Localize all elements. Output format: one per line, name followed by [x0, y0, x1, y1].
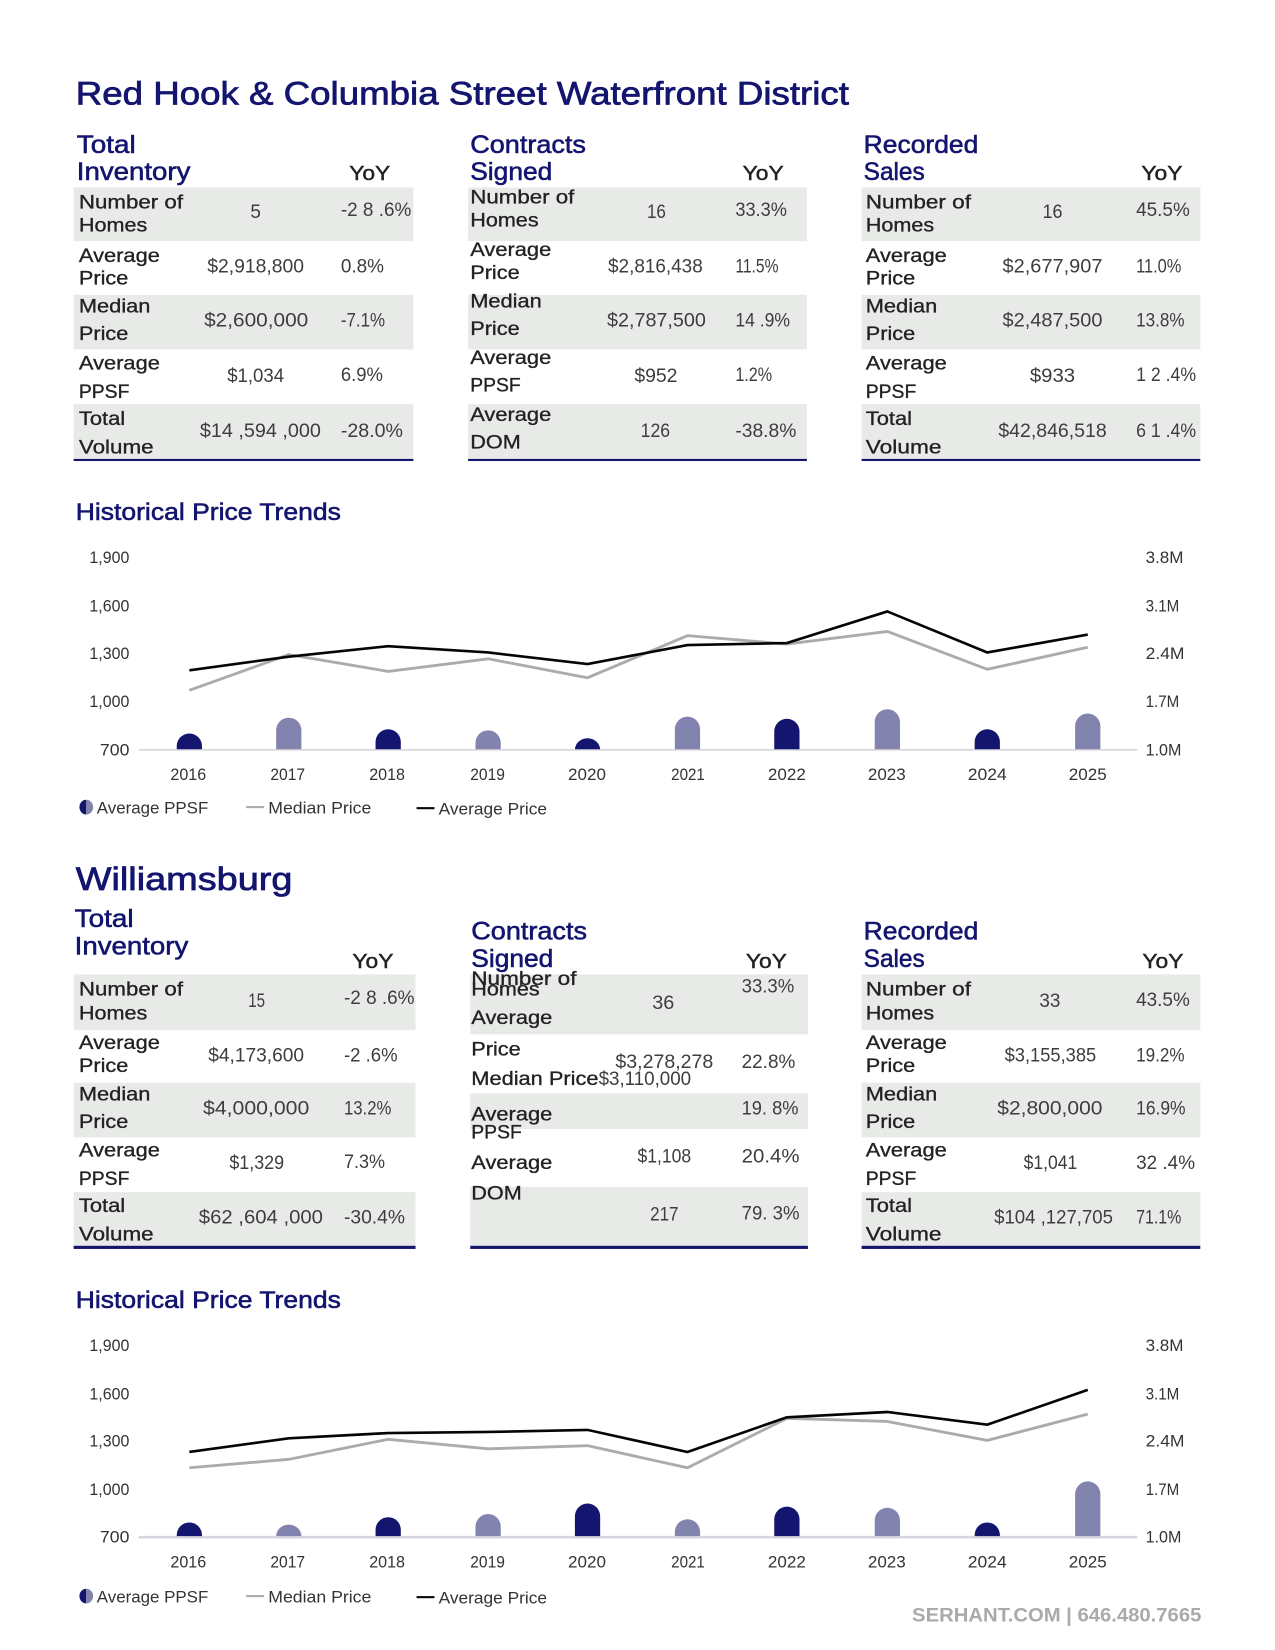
- row labels: Price: [470, 319, 520, 340]
- year over year values: 43.5%: [1136, 990, 1190, 1011]
- values: 126: [641, 421, 670, 442]
- year over year values: 33.3%: [742, 976, 794, 997]
- heading: total inventory: Inventory: [75, 932, 189, 960]
- heading: recorded sales: Sales: [864, 158, 925, 186]
- values: 5: [250, 202, 261, 223]
- heading: recorded sales: Recorded: [864, 131, 978, 159]
- section: Williamsburg: [74, 860, 1200, 1607]
- values: $2,787,500: [607, 310, 706, 331]
- year over year values: 33.3%: [735, 200, 787, 221]
- heading: recorded sales: YoY: [1142, 951, 1183, 973]
- row labels: Average: [471, 1105, 552, 1126]
- row labels: Median: [866, 297, 937, 318]
- year over year values: 14 .9%: [735, 310, 790, 331]
- row labels: Total: [866, 409, 912, 430]
- row labels: [471, 969, 599, 1205]
- values: $2,816,438: [608, 257, 703, 278]
- row labels: Price: [79, 1056, 128, 1077]
- row labels: Total: [866, 1196, 912, 1217]
- heading: total inventory: Inventory: [77, 158, 191, 186]
- values: 33: [1039, 991, 1060, 1012]
- year over year values: 6 1 .4%: [1136, 421, 1196, 442]
- row labels: PPSF: [866, 1169, 916, 1190]
- heading: recorded sales: Sales: [864, 945, 925, 973]
- x axis years: 2019: [470, 765, 505, 784]
- x axis years: 2022: [768, 765, 806, 784]
- right axis labels: 3.8M: [1146, 548, 1183, 567]
- row labels: Price: [79, 1112, 128, 1133]
- year over year values: 22.8%: [742, 1052, 795, 1073]
- line: average price: [189, 1390, 1088, 1452]
- legend: Average PPSF: [97, 798, 208, 817]
- row labels: Homes: [470, 210, 539, 231]
- values: $2,918,800: [207, 257, 304, 278]
- values: $104 ,127,705: [994, 1208, 1113, 1229]
- row labels: Average: [866, 1033, 947, 1054]
- year over year values: 0.8%: [341, 257, 384, 278]
- panel: contracts signed table: [468, 131, 807, 461]
- left axis labels: 1,900: [89, 548, 129, 567]
- heading: historical price trends: Historical Price Trends: [76, 1287, 341, 1314]
- row labels: Average: [470, 240, 551, 261]
- row labels: PPSF: [470, 376, 521, 397]
- legend: Average Price: [439, 1588, 547, 1607]
- row labels: Volume: [79, 1225, 154, 1246]
- year over year values: 11.0%: [1136, 257, 1182, 278]
- x axis years: 2023: [868, 1553, 906, 1572]
- right axis labels: 1.7M: [1146, 692, 1179, 711]
- row labels: Average: [866, 1140, 947, 1161]
- year over year values: [742, 976, 800, 1224]
- x axis years: [170, 1553, 1107, 1572]
- year over year values: 7.3%: [344, 1152, 385, 1173]
- row labels: Number of: [79, 193, 184, 214]
- heading: total inventory: YoY: [349, 163, 390, 185]
- year over year values: -2 8 .6%: [344, 988, 415, 1009]
- left axis labels: 1,000: [89, 1480, 129, 1499]
- legend: [79, 798, 547, 818]
- values: $3,110,000: [599, 1069, 691, 1090]
- x axis years: 2025: [1069, 1553, 1107, 1572]
- x axis years: 2016: [170, 765, 206, 784]
- values: [607, 202, 706, 442]
- left axis labels: 1,900: [89, 1336, 129, 1355]
- heading: contracts signed: Contracts: [471, 918, 587, 946]
- row labels: PPSF: [79, 382, 129, 403]
- year over year values: 19. 8%: [742, 1098, 799, 1119]
- row labels: Median: [79, 297, 150, 318]
- year over year values: 11.5%: [735, 257, 779, 278]
- row labels: [79, 979, 184, 1246]
- row labels: Price: [866, 268, 915, 289]
- values: $62 ,604 ,000: [199, 1208, 323, 1229]
- heading: total inventory: [75, 905, 393, 973]
- year over year values: 13.2%: [344, 1098, 391, 1119]
- heading: contracts signed: Signed: [470, 158, 552, 186]
- left axis labels: 700: [100, 1527, 129, 1546]
- values: $3,278,278: [615, 1052, 713, 1073]
- row labels: [79, 193, 184, 459]
- row labels: Price: [79, 324, 128, 345]
- row labels: Average: [866, 246, 947, 267]
- year over year values: 79. 3%: [742, 1203, 800, 1224]
- row labels: Number of: [866, 979, 972, 1000]
- heading: recorded sales: Recorded: [864, 918, 978, 946]
- chart: historical price trends: [79, 548, 1185, 818]
- heading: contracts signed: Contracts: [470, 131, 586, 159]
- values: $1,034: [227, 366, 284, 387]
- x axis years: 2021: [671, 1553, 705, 1572]
- legend: Average Price: [439, 799, 547, 818]
- line: median price: [189, 1414, 1088, 1468]
- row labels: PPSF: [79, 1169, 129, 1190]
- legend: Median Price: [268, 798, 371, 817]
- panel: recorded sales table: [862, 131, 1200, 461]
- section: Red Hook and Columbia Street Waterfront District: [74, 74, 1200, 818]
- year over year values: 1 2 .4%: [1136, 365, 1196, 386]
- row labels: [866, 979, 972, 1246]
- row labels: Price: [866, 1056, 915, 1077]
- heading: contracts signed: YoY: [743, 163, 784, 185]
- values: 16: [1043, 202, 1063, 223]
- row labels: Price: [79, 268, 128, 289]
- year over year values: [341, 200, 411, 442]
- values: $3,155,385: [1005, 1046, 1096, 1067]
- values: $2,600,000: [204, 310, 308, 331]
- bars: average PPSF: [177, 709, 1100, 750]
- x axis years: 2018: [369, 1553, 405, 1572]
- right axis labels: 2.4M: [1146, 1432, 1185, 1451]
- values: $4,000,000: [203, 1098, 309, 1119]
- row labels: Price: [471, 1039, 521, 1060]
- heading: recorded sales: [864, 131, 1182, 186]
- row labels: Median: [79, 1085, 150, 1106]
- row labels: Median Price: [471, 1069, 599, 1090]
- values: [200, 202, 321, 442]
- values: $1,329: [229, 1153, 284, 1174]
- year over year values: 16.9%: [1136, 1098, 1186, 1119]
- year over year values: 45.5%: [1136, 200, 1190, 221]
- row labels: Price: [866, 324, 915, 345]
- x axis years: 2025: [1069, 765, 1107, 784]
- year over year values: 71.1%: [1136, 1208, 1182, 1229]
- year over year values: -28.0%: [341, 421, 403, 442]
- row labels: Total: [79, 409, 125, 430]
- left axis labels: 1,300: [89, 1432, 129, 1451]
- values: [199, 991, 323, 1229]
- row labels: Average: [471, 1008, 552, 1029]
- row labels: Average: [470, 405, 551, 426]
- year over year values: [344, 988, 415, 1229]
- row labels: [470, 187, 575, 453]
- values: $42,846,518: [998, 421, 1107, 442]
- year over year values: -2 8 .6%: [341, 200, 411, 221]
- x axis years: 2021: [671, 765, 705, 784]
- x axis years: 2017: [270, 765, 305, 784]
- row labels: Volume: [866, 438, 942, 459]
- right axis labels: 1.7M: [1146, 1480, 1179, 1499]
- panel: contracts signed table: [470, 918, 808, 1249]
- heading: contracts signed: [470, 131, 784, 186]
- right axis labels: [1146, 1336, 1185, 1546]
- left axis labels: [89, 548, 129, 760]
- year over year values: 32 .4%: [1136, 1153, 1195, 1174]
- panel: total inventory table: [74, 905, 416, 1249]
- row labels: Volume: [866, 1225, 942, 1246]
- row labels: Total: [79, 1196, 125, 1217]
- values: 217: [650, 1205, 679, 1226]
- legend: Average PPSF: [97, 1587, 208, 1606]
- title: Williamsburg: [76, 860, 292, 897]
- x axis years: 2017: [270, 1553, 305, 1572]
- year over year values: 19.2%: [1136, 1046, 1185, 1067]
- left axis labels: 700: [100, 741, 129, 760]
- values: $14 ,594 ,000: [200, 421, 321, 442]
- panel: recorded sales table: [862, 918, 1200, 1249]
- year over year values: [735, 200, 797, 442]
- right axis labels: 1.0M: [1146, 1527, 1181, 1546]
- row labels: [866, 193, 972, 459]
- year over year values: 20.4%: [742, 1147, 800, 1168]
- row labels: Number of: [470, 187, 575, 208]
- panel: total inventory table: [74, 131, 413, 461]
- year over year values: -38.8%: [735, 421, 797, 442]
- x axis years: 2018: [369, 765, 405, 784]
- values: $1,108: [638, 1147, 691, 1168]
- row labels: Homes: [79, 216, 147, 237]
- row labels: Median: [470, 291, 542, 312]
- values: [994, 991, 1113, 1229]
- row labels: Median: [866, 1085, 937, 1106]
- left axis labels: 1,300: [89, 644, 129, 663]
- row labels: Average: [79, 1033, 160, 1054]
- values: 15: [248, 991, 265, 1012]
- x axis years: [170, 765, 1107, 784]
- row labels: PPSF: [866, 382, 916, 403]
- row labels: Average: [79, 246, 160, 267]
- heading: historical price trends: Historical Price Trends: [76, 499, 341, 526]
- year over year values: [1136, 200, 1196, 442]
- values: [599, 993, 713, 1226]
- right axis labels: 3.8M: [1146, 1336, 1183, 1355]
- heading: contracts signed: [471, 918, 787, 973]
- right axis labels: [1146, 548, 1185, 760]
- year over year values: [1136, 990, 1195, 1229]
- heading: contracts signed: YoY: [746, 951, 787, 973]
- row labels: Average: [471, 1153, 552, 1174]
- year over year values: -2 .6%: [344, 1046, 398, 1067]
- x axis years: 2020: [568, 1553, 606, 1572]
- x axis years: 2024: [968, 765, 1007, 784]
- footer contact: SERHANT.COM | 646.480.7665: [912, 1605, 1201, 1626]
- year over year values: 6.9%: [341, 365, 383, 386]
- row labels: Price: [866, 1112, 915, 1133]
- row labels: Volume: [79, 438, 154, 459]
- legend: [79, 1587, 547, 1607]
- x axis years: 2019: [470, 1553, 505, 1572]
- row labels: Average: [866, 353, 947, 374]
- row labels: Number of: [471, 969, 577, 990]
- x axis years: 2023: [868, 765, 906, 784]
- row labels: Homes: [866, 216, 934, 237]
- left axis labels: 1,600: [89, 596, 129, 615]
- x axis years: 2024: [968, 1553, 1007, 1572]
- values: $2,677,907: [1003, 257, 1102, 278]
- right axis labels: 3.1M: [1146, 1384, 1179, 1403]
- values: 16: [647, 202, 666, 223]
- row labels: Homes: [471, 979, 540, 1000]
- heading: recorded sales: YoY: [1141, 163, 1182, 185]
- values: $952: [634, 366, 677, 387]
- right axis labels: 1.0M: [1146, 741, 1181, 760]
- heading: total inventory: Total: [77, 131, 136, 159]
- row labels: DOM: [471, 1184, 522, 1205]
- row labels: Homes: [79, 1004, 147, 1025]
- heading: contracts signed: Signed: [471, 945, 553, 973]
- heading: total inventory: [77, 131, 390, 186]
- values: $1,041: [1024, 1153, 1077, 1174]
- values: $2,800,000: [997, 1098, 1102, 1119]
- x axis years: 2016: [170, 1553, 206, 1572]
- year over year values: -30.4%: [344, 1208, 405, 1229]
- year over year values: 1.2%: [735, 365, 772, 386]
- bars: average PPSF: [177, 1481, 1100, 1536]
- year over year values: 13.8%: [1136, 310, 1185, 331]
- heading: total inventory: Total: [75, 905, 134, 933]
- x axis years: 2020: [568, 765, 606, 784]
- left axis labels: 1,600: [89, 1384, 129, 1403]
- line: median price: [189, 631, 1088, 690]
- left axis labels: [89, 1336, 129, 1546]
- x axis years: 2022: [768, 1553, 806, 1572]
- row labels: Number of: [79, 979, 184, 1000]
- row labels: Average: [79, 353, 160, 374]
- right axis labels: 3.1M: [1146, 596, 1179, 615]
- values: $933: [1030, 366, 1075, 387]
- row labels: Average: [79, 1140, 160, 1161]
- heading: total inventory: YoY: [352, 951, 393, 973]
- row labels: Price: [470, 263, 520, 284]
- values: [998, 202, 1107, 442]
- heading: recorded sales: [864, 918, 1183, 973]
- values: $4,173,600: [208, 1046, 304, 1067]
- row labels: PPSF: [471, 1122, 522, 1143]
- values: $2,487,500: [1003, 310, 1102, 331]
- row labels: Average: [470, 348, 551, 369]
- row labels: DOM: [470, 432, 521, 453]
- values: 36: [652, 993, 674, 1014]
- right axis labels: 2.4M: [1146, 644, 1185, 663]
- row labels: Number of: [866, 193, 972, 214]
- row labels: Homes: [866, 1004, 934, 1025]
- line: average price: [189, 611, 1088, 670]
- chart: historical price trends: [79, 1336, 1185, 1607]
- left axis labels: 1,000: [89, 692, 129, 711]
- title: Red Hook & Columbia Street Waterfront District: [76, 74, 849, 111]
- year over year values: -7.1%: [341, 310, 385, 331]
- legend: Median Price: [268, 1587, 371, 1606]
